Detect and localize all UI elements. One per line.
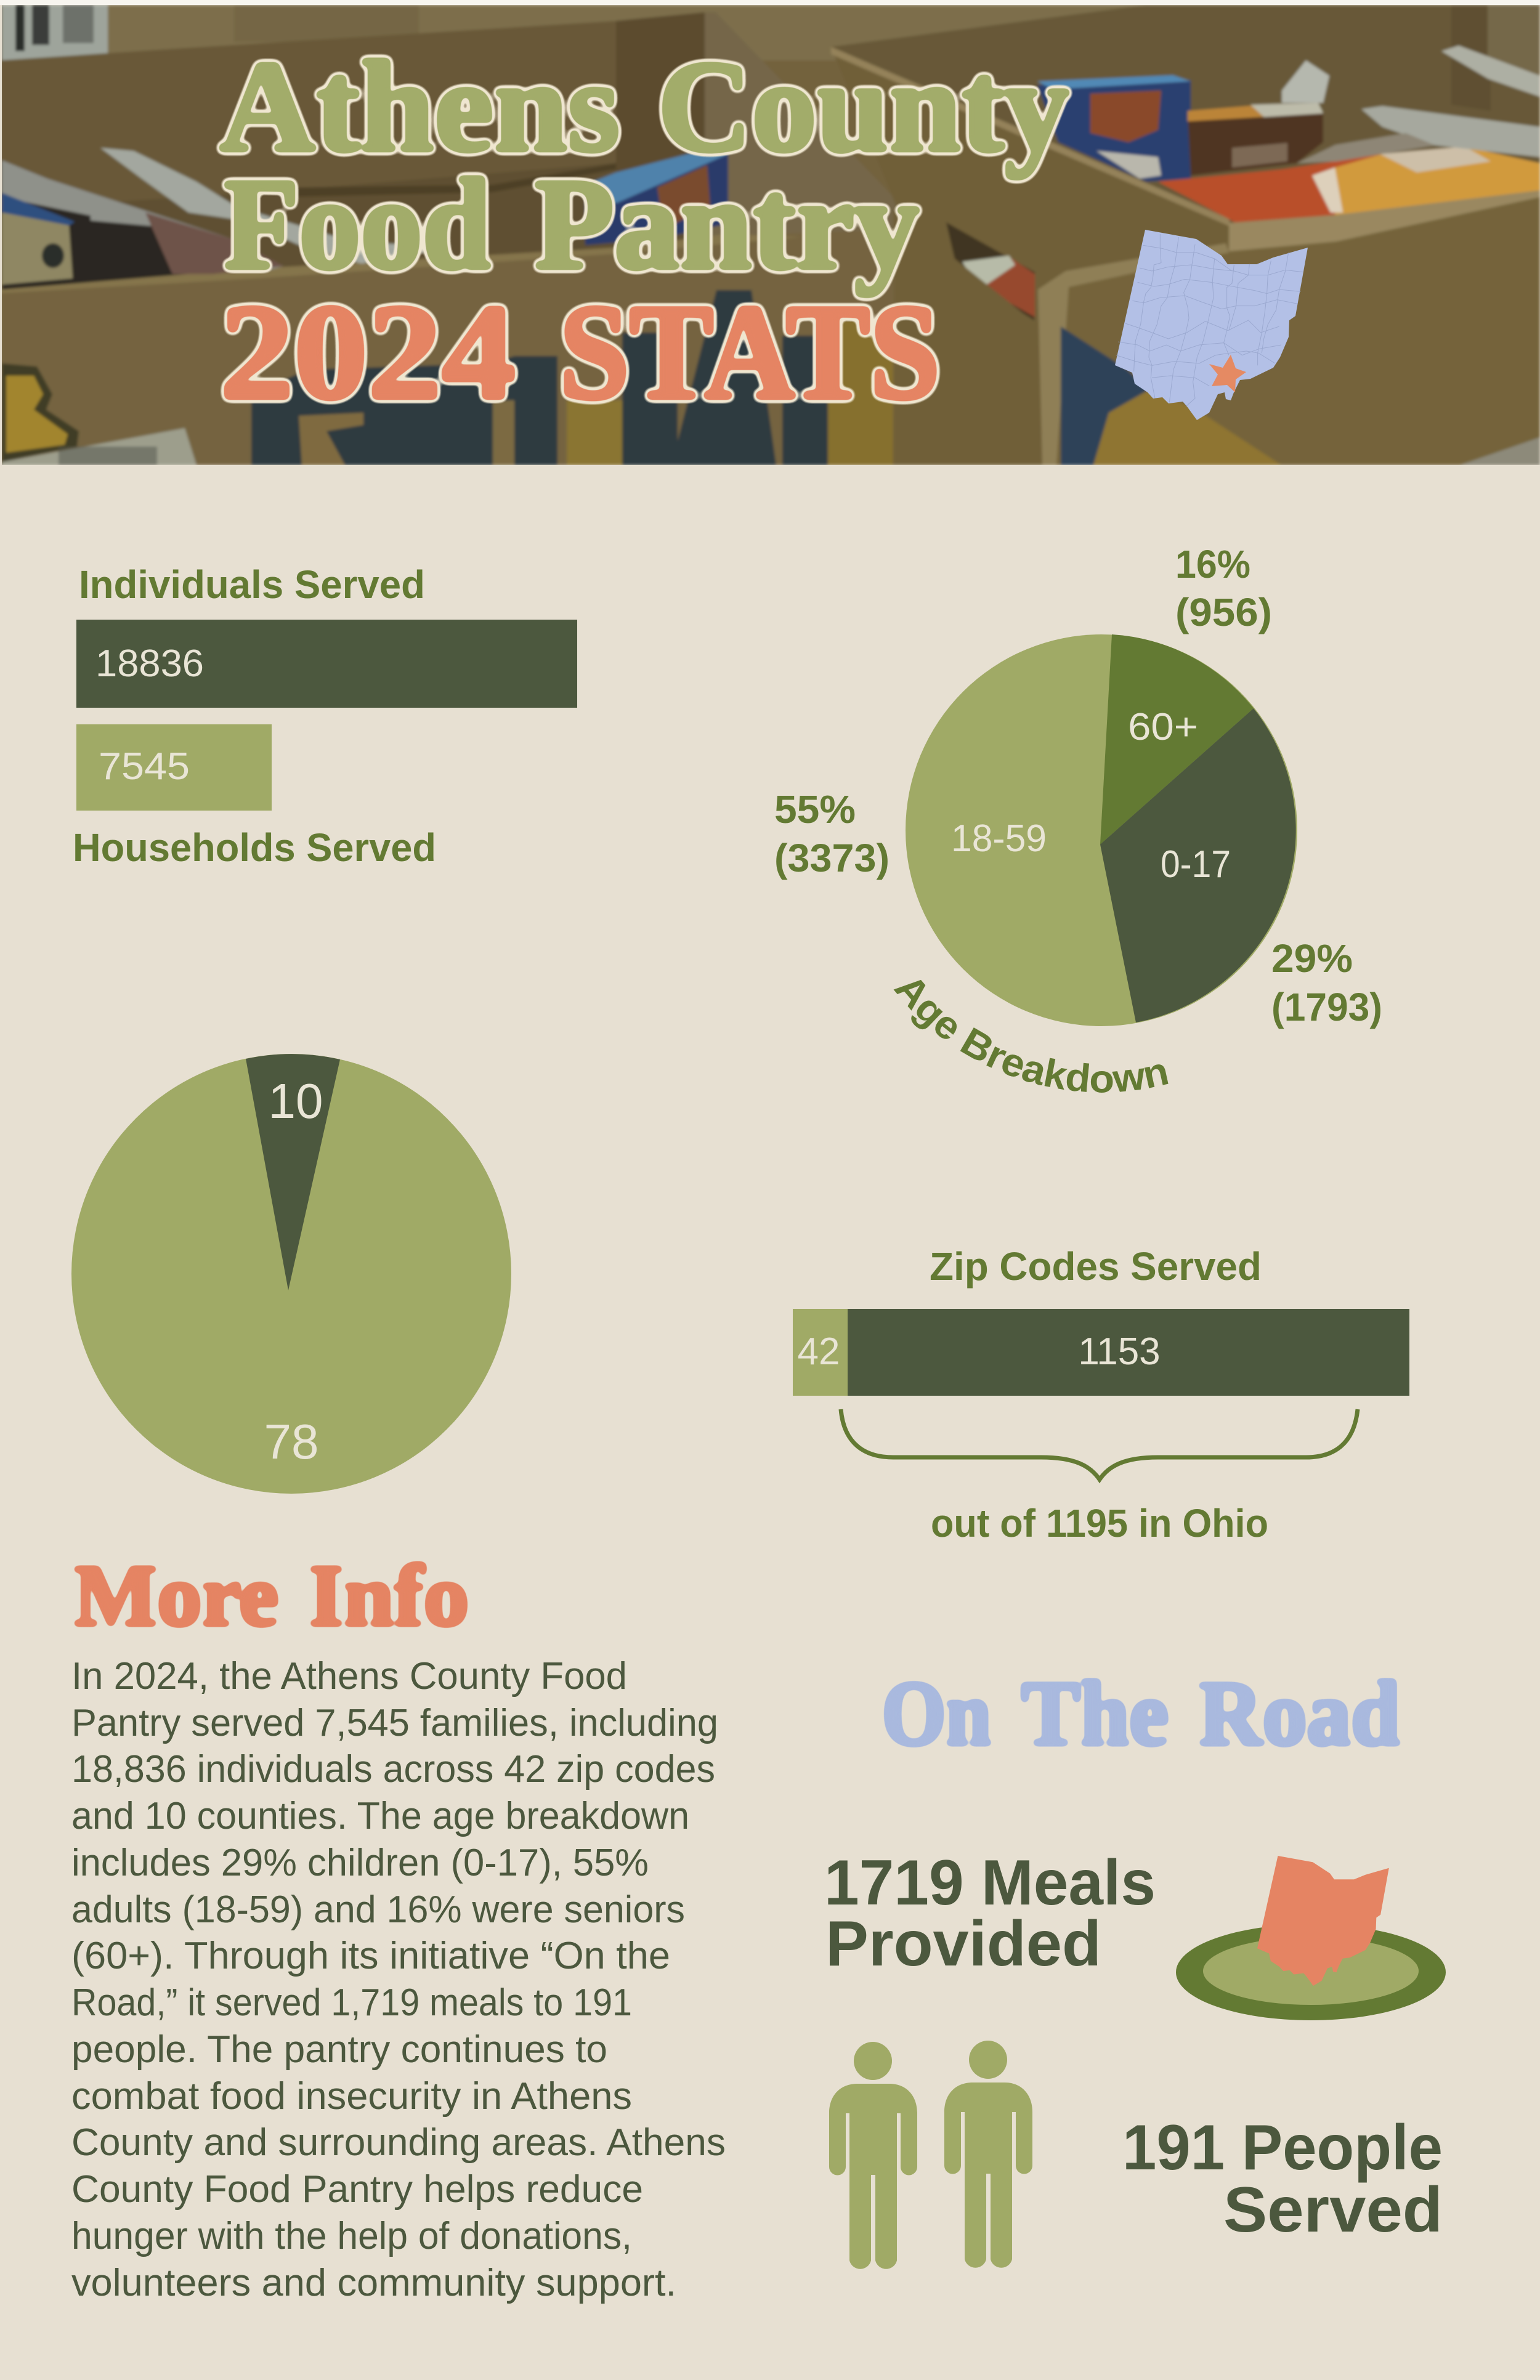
person 1 — [829, 2042, 917, 2269]
chart: zip codes bar: 42 — [798, 1330, 840, 1373]
text block: more info paragraph: people. The pantry continues to — [71, 2028, 607, 2071]
heading: On The Road — [882, 1662, 1400, 1765]
text: meals provided: Provided — [825, 1908, 1101, 1980]
chart: age breakdown pie: 0-17 — [1161, 843, 1231, 886]
text block: more info paragraph: hunger with the help of donations, — [71, 2215, 632, 2257]
panel: individuals and households bars: Individuals Served — [79, 562, 425, 607]
brace — [841, 1409, 1358, 1479]
panel: individuals and households bars: 18836 — [95, 642, 204, 685]
title: STATS — [559, 277, 940, 428]
heading: On The Road: On — [882, 1662, 991, 1765]
chart: age breakdown pie: 16% — [1175, 542, 1250, 586]
text: people served: Served — [1223, 2174, 1443, 2246]
title: Pantry — [534, 152, 920, 296]
icon: two people — [829, 2041, 1032, 2269]
text block: more info paragraph: County Food Pantry helps reduce — [71, 2168, 643, 2211]
heading: More Info: More — [74, 1547, 278, 1644]
chart: age breakdown pie: 29% — [1271, 936, 1353, 981]
county lines — [1116, 234, 1303, 407]
white bags right — [1361, 106, 1540, 157]
chart: zip codes bar: out of 1195 in Ohio — [931, 1501, 1268, 1545]
right box front wall — [1229, 191, 1540, 465]
icon: Ohio county map with Athens star — [1115, 230, 1308, 420]
text block: more info paragraph — [71, 1655, 726, 2304]
text: people served: 191 People — [1122, 2112, 1443, 2184]
icon: Ohio on a plate — [1176, 1856, 1446, 2020]
text: meals provided — [824, 1847, 1156, 1980]
white label bottom left — [2, 428, 197, 465]
chips bag — [1158, 154, 1382, 222]
chart: age breakdown pie: 18-59 — [951, 817, 1047, 860]
text block: more info paragraph: 18,836 individuals across 42 zip codes — [71, 1748, 715, 1791]
yellow mark bottom left — [2, 363, 79, 462]
text block: more info paragraph: (60+). Through its initiative “On the — [71, 1935, 670, 1977]
center lower panel — [893, 212, 1018, 310]
heading: On The Road: Road — [1199, 1662, 1400, 1765]
panel: individuals and households bars — [73, 562, 577, 870]
text block: more info paragraph: includes 29% children (0-17), 55% — [71, 1842, 649, 1884]
wall behind — [105, 5, 1152, 60]
text: people served — [1122, 2112, 1443, 2246]
person 2 — [944, 2041, 1032, 2268]
banner photo: cardboard boxes of food — [0, 5, 1540, 465]
title: County — [658, 34, 1069, 179]
title: Food — [224, 152, 491, 296]
heading: More Info — [74, 1547, 469, 1644]
text: meals provided: 1719 Meals — [824, 1847, 1156, 1919]
panel: individuals and households bars: Households Served — [73, 825, 436, 870]
title — [219, 34, 1069, 428]
text block: more info paragraph: adults (18-59) and 16% were seniors — [71, 1888, 685, 1931]
chart: age breakdown pie: (1793) — [1271, 985, 1382, 1029]
lower right box — [1044, 251, 1386, 465]
chart: age breakdown pie: (956) — [1175, 590, 1272, 634]
text block: more info paragraph: Road,” it served 1,719 meals to 191 — [71, 1981, 632, 2024]
right box back — [834, 5, 1539, 198]
panel: individuals and households bars: 7545 — [99, 745, 190, 788]
text block: more info paragraph: combat food insecurity in Athens — [71, 2075, 632, 2118]
chart: age breakdown pie: Age Breakdown — [893, 979, 1168, 1093]
chart: counties pie: 10 — [269, 1074, 323, 1128]
heading: On The Road: The — [1021, 1662, 1169, 1765]
chart: age breakdown pie — [774, 542, 1382, 1093]
chart: zip codes bar — [793, 1244, 1409, 1545]
right cheese box — [1037, 80, 1191, 182]
text block: more info paragraph: In 2024, the Athens County Food — [71, 1655, 627, 1698]
flap — [1282, 60, 1329, 103]
text block: more info paragraph: and 10 counties. The age breakdown — [71, 1795, 689, 1837]
chart: zip codes bar: Zip Codes Served — [930, 1244, 1262, 1289]
title: Athens — [219, 34, 620, 179]
chart: zip codes bar: 1153 — [1078, 1330, 1161, 1373]
left food items — [2, 203, 182, 291]
text block: more info paragraph: Pantry served 7,545 families, including — [71, 1702, 718, 1744]
navy lettering on box — [251, 356, 557, 465]
handle hole — [946, 222, 1035, 320]
heading: More Info: Info — [309, 1547, 469, 1644]
left box inside — [2, 21, 617, 201]
text block: more info paragraph: volunteers and community support. — [71, 2262, 676, 2304]
chart: age breakdown pie: (3373) — [774, 836, 890, 880]
chart: counties pie — [71, 1054, 511, 1494]
chart: age breakdown pie: 55% — [774, 787, 856, 832]
right box near wall — [836, 57, 900, 205]
middle blue cheese box — [585, 148, 728, 245]
text block: more info paragraph: County and surrounding areas. Athens — [71, 2121, 726, 2164]
left front box — [270, 232, 871, 280]
chart: counties pie: 78 — [264, 1414, 318, 1469]
title: 2024 — [220, 277, 516, 428]
chart: age breakdown pie: 60+ — [1128, 706, 1198, 748]
grains box — [1188, 113, 1323, 176]
